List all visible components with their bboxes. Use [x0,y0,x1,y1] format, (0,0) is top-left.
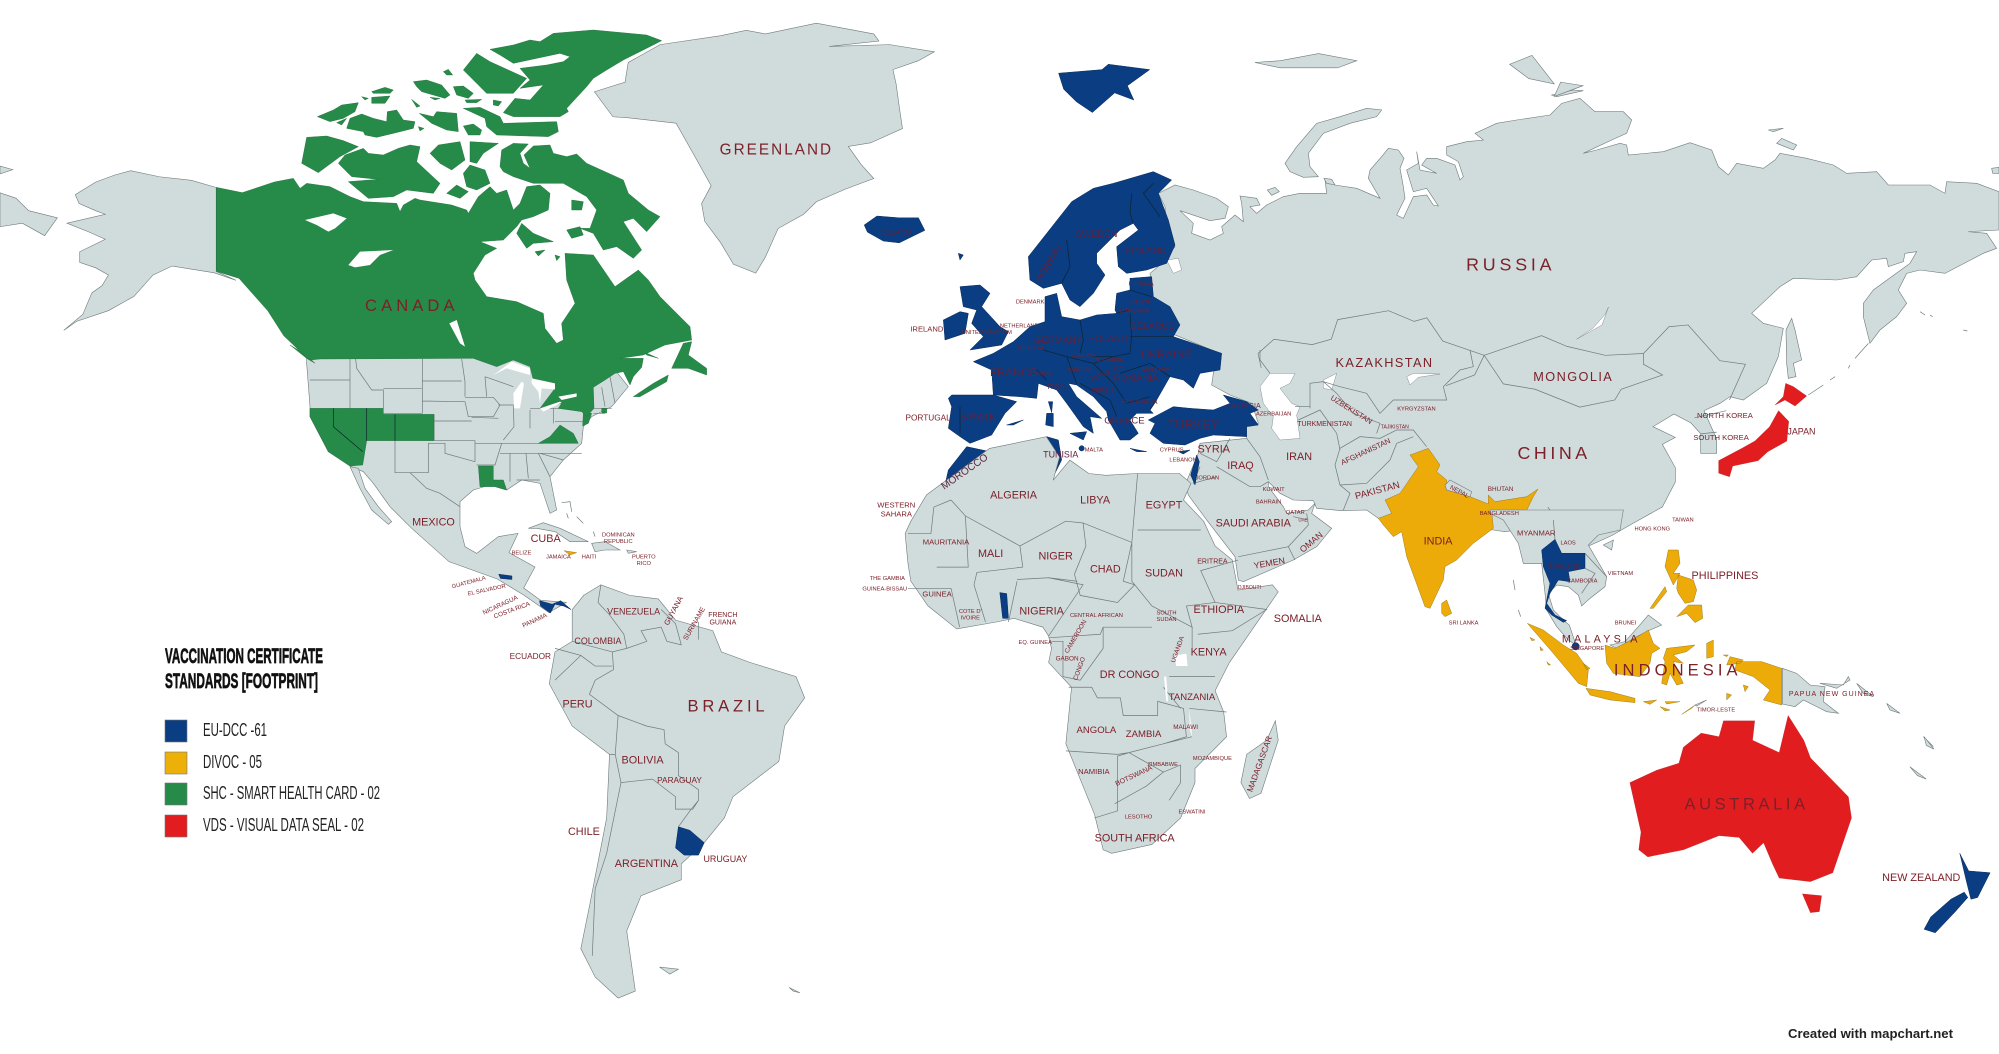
small country names: COSTA RICA [493,600,532,620]
country: Iceland [864,216,925,243]
small country names: BANGLADESH [1480,511,1519,517]
labels on European countries [878,228,1580,571]
country: Thailand [1542,539,1585,622]
medium country names: ARGENTINA [615,858,679,870]
labels on European countries: SWEDEN [1075,229,1117,240]
map: Russia, Central Asia, China, Middle East [1150,90,1999,582]
small country names: CZECHIA [1071,353,1096,359]
small country names: MOLDOVA [1142,367,1171,373]
Caspian Sea [1260,373,1300,440]
small country names: ESWATINI [1179,809,1206,815]
medium country names: JAPAN [1787,427,1815,437]
medium country names: CHILE [568,826,600,838]
island: Sakhalin [1786,318,1802,378]
labels on European countries: FRANCE [990,367,1037,379]
small country names: CAMEROON [1064,618,1089,655]
small country names: JAMAICA [546,554,571,560]
labels on European countries: GREECE [1104,415,1145,426]
small country names: CENTRAL AFRICAN [1070,613,1123,619]
Morocco [927,447,993,495]
small country names: SOUTH KOREA [1693,433,1750,442]
labels on European countries: BULGARIA [1122,399,1158,406]
country: Panama [539,601,571,613]
medium country names: YEMEN [1253,555,1286,571]
Middle East and Central Asia borders [1193,350,1473,560]
medium country names: PARAGUAY [657,776,702,785]
labels on European countries: GEORGIA [1228,403,1261,410]
continent: South America [549,585,805,998]
small country names: QATAR [1286,510,1305,516]
small country names: MALTA [1085,447,1103,453]
large country names: INDONESIA [1614,661,1742,680]
Canadian Maritime islands [290,342,707,397]
map: Southeast Asia and Indonesia [1490,510,1933,747]
small country names: MALAWI [1173,724,1198,731]
islands: Hispaniola and Puerto Rico [592,542,637,553]
small country names: TIMOR-LESTE [1697,707,1735,713]
country: Canada mainland [216,178,692,417]
medium country names: EGYPT [1146,500,1183,512]
small country names: KUWAIT [1263,487,1285,493]
country: Malaysia and Brunei (Borneo north) [1610,615,1662,648]
medium country names: BOLIVIA [621,755,664,767]
large country names: KAZAKHSTAN [1336,355,1434,370]
countries: United States, Mexico, Central America [307,357,628,613]
Tunisia [1041,437,1062,480]
legend [165,645,380,837]
medium country names: SUDAN [1145,567,1183,579]
country: India [1378,448,1538,608]
Kuril islands [1808,312,1967,395]
legend item: SHC [165,783,380,805]
small country names: CYPRUS [1160,447,1184,453]
labels on European countries: TUNISIA [1043,450,1078,460]
large country names: GREENLAND [720,141,833,158]
Asian borders [1258,311,1745,536]
small country names: MOZAMBIQUE [1193,756,1232,762]
small country names: TURKMENISTAN [1297,421,1352,428]
islands: New Caledonia and Vanuatu [1910,737,1934,779]
legend title: STANDARDS [FOOTPRINT] [165,670,318,693]
country: Sri Lanka [1442,600,1452,617]
map: Arctic islands and Siberia water [1059,54,1789,536]
small country names: GUINEA [922,590,953,599]
labels on European countries: HUNGARY [1090,364,1125,383]
legend title [165,645,323,693]
Lake Ladoga [1167,258,1182,273]
large country names: AUSTRALIA [1685,795,1809,814]
labels on European countries: MOROCCO [940,452,990,492]
small country names: DJIBOUTI [1238,585,1261,591]
small country names: TAJIKISTAN [1381,424,1409,430]
small country names: MAURITANIA [923,537,970,546]
small country names: GUYANA [662,594,685,627]
small country names: ZIMBABWE [1147,762,1178,768]
medium country names: SOMALIA [1274,613,1323,625]
legend title: VACCINATION CERTIFICATE [165,645,323,668]
small country names: MADAGASCAR [1246,735,1274,793]
small country names [451,282,1754,820]
medium country names: MALI [978,548,1003,560]
Smart Health Card: New Jersey [583,413,592,426]
legend item: EU-DCC [165,720,267,742]
medium country names: ALGERIA [990,489,1038,501]
Smart Health Card: Virginia [538,425,578,443]
small country names: CAMBODIA [1567,579,1598,585]
map: Middle East and South Asia [1193,350,1538,617]
medium country names: SYRIA [1197,444,1231,456]
Israel [1191,455,1199,485]
small country names: SWITZ. [1034,371,1054,377]
Scandinavia and Finland [1028,172,1175,307]
map: Japan Hokkaido and Kurils [1775,312,1967,406]
state lines in green block [333,408,395,452]
medium country names: MEXICO [412,516,455,528]
labels on European countries: ROMANIA [1114,373,1159,384]
small country names: HONG KONG [1634,526,1671,532]
medium country names: PERU [562,699,593,711]
medium country names: TANZANIA [1169,692,1216,703]
small country names: PUERTO [632,554,656,560]
small country names: UNITED KINGDOM [962,330,1012,336]
large country names: CHINA [1517,443,1591,463]
medium country names: URUGUAY [703,854,747,864]
Aral Sea and Lake Balkhash [1323,373,1440,390]
Tasmania [1802,894,1822,913]
country: Togo [1000,593,1008,618]
small country names: COTE D' [959,609,982,615]
country: Singapore [1572,643,1579,650]
medium country names: KENYA [1191,646,1227,658]
small country names: BRUNEI [1615,621,1637,627]
small country names: SLOVAKIA [1095,358,1123,364]
islands: Falklands and South Georgia [659,967,800,993]
small country names: TAIWAN [1672,517,1694,523]
medium country names: LIBYA [1080,495,1111,507]
islands: Chukotka wrap [0,166,57,236]
small country names: ESTONIA [1129,282,1154,288]
continent: Africa [905,437,1278,853]
labels on European countries: FINLAND [1126,246,1167,257]
lake and river water [1164,654,1192,737]
state borders [310,359,615,507]
legend item: SHC: SHC - SMART HEALTH CARD - 02 [203,783,380,803]
small Pacific islands [1513,580,1933,747]
small country names: AUSTRIA [1067,367,1092,373]
small country names: BELGIUM [1017,345,1043,351]
country: Indonesia [1527,623,1782,714]
small country names: NORTH KOREA [1697,411,1754,420]
map: Greenland, Alaska and Chukotka wrap [0,23,934,330]
archipelago: Svalbard [1059,64,1150,112]
small country names: KYRGYZSTAN [1397,407,1436,413]
medium country names [412,324,1961,884]
island: Novaya Zemlya [1285,108,1382,177]
small country names: ERITREA [1197,559,1228,566]
islands: Franz Josef Land and Severnaya Zemlya [1255,54,1583,96]
medium country names: CHAD [1090,563,1121,575]
small country names: SINGAPORE [1570,646,1604,652]
water: Great Lakes and Lake Winnipeg [449,303,577,412]
medium country names: IRAQ [1227,460,1254,472]
Smart Health Card: Louisiana [478,466,507,490]
Bahamas [562,502,595,537]
large country names: MALAYSIA [1562,634,1641,646]
small country names: WESTERN [877,500,915,509]
medium country names: PORTUGAL [905,414,951,423]
Ireland [943,312,968,340]
medium country names: NIGERIA [1019,606,1065,618]
map: Oceania [1630,716,1990,933]
small country names: EQ. GUINEA [1019,640,1052,646]
United Kingdom [960,285,1008,350]
map: Africa and South America [499,437,1278,998]
islands: Kolguev and Severnaya Zemlya [1267,90,1583,195]
medium country names: COLOMBIA [574,636,621,646]
small country names: GUIANA [709,620,737,627]
country: Australia [1630,716,1851,882]
European borders [960,183,1173,433]
country: Japan, Honshu and Kyushu [1719,411,1789,477]
medium country names: ZAMBIA [1126,729,1162,740]
small country names: SUDAN [1157,617,1177,623]
legend item: VDS [165,815,364,837]
Smart Health Card: Connecticut [602,408,607,413]
small country names: UGANDA [1170,635,1186,664]
small country names: LEBANON [1169,458,1197,464]
country: New Zealand [1924,853,1990,933]
labels on European countries: NORWAY [1034,241,1066,283]
labels on European countries: SPAIN [960,412,998,424]
small country names: UZBEKISTAN [1329,393,1374,426]
African borders [908,474,1267,818]
labels on European countries: TURKEY [1167,416,1220,431]
Great Bear and Great Slave lakes [305,213,393,267]
medium country names: IRELAND [910,324,944,333]
Turkey and Georgia [1148,395,1258,445]
small country names: EL SALVADOR [467,584,506,598]
labels on European countries: POLAND [1088,334,1128,345]
labels on European countries: BELARUS [1130,321,1175,332]
small country names: BELIZE [512,551,531,557]
South American borders [555,585,698,956]
small country names: SOUTH [1157,611,1177,617]
mainland Southeast Asia [1490,510,1623,645]
labels on European countries: ITALY [1048,384,1066,391]
medium country names: SAUDI ARABIA [1216,518,1292,530]
medium country names: DR CONGO [1100,669,1159,681]
large country names: MONGOLIA [1533,369,1613,384]
map: Europe and Mediterranean (EU-DCC) [927,172,1258,495]
small country names: FRENCH [708,612,737,619]
legend item: DIVOC [165,752,262,774]
small country names: LATVIA [1131,299,1151,305]
Baja California [350,467,392,524]
large country names: CANADA [365,296,459,315]
small country names: NETHERLANDS [1000,324,1043,330]
countries: Russia, Central Asia, China, Middle East [1150,98,1999,582]
country: Japan, Hokkaido [1775,383,1807,406]
map: USA, Mexico, Central America [290,342,707,613]
continental Europe [973,277,1222,440]
medium country names: NEW ZEALAND [1882,872,1961,884]
medium country names: ETHIOPIA [1194,604,1245,616]
country: Philippines [1650,550,1703,623]
country: Greenland [594,23,934,273]
small country names: AZERBAIJAN [1256,412,1291,418]
small country names: LITHUANIA [1120,308,1150,314]
Lake Baikal [1577,307,1608,339]
islands: Wrangel and New Siberian [1768,128,1999,173]
medium country names: SOUTH AFRICA [1095,832,1175,844]
labels on European countries: SERBIA [1091,388,1115,395]
country: Alaska [64,171,236,330]
Southeast Asia borders [1553,520,1607,593]
medium country names: ANGOLA [1077,725,1117,736]
credit: Created with mapchart.net [1788,1027,1954,1041]
countries: Papua New Guinea and Timor-Leste [1695,668,1900,713]
small country names: DOMINICAN [602,533,635,539]
small country names: JORDAN [1196,475,1219,481]
island: Jamaica [564,551,577,555]
labels on European countries: ICELAND [878,228,912,237]
country: Honduras/El Salvador [499,574,512,579]
medium country names: PHILIPPINES [1692,570,1758,582]
small country names: CONGO [1072,656,1087,681]
Spain and Portugal [948,395,1017,443]
medium country names: CUBA [531,533,561,545]
small country names: HAITI [582,554,597,560]
island: Madagascar [1241,721,1278,799]
map labels [365,141,1961,884]
medium country names: NIGER [1038,551,1073,563]
Hainan [1603,540,1613,550]
small country names: SAHARA [881,509,913,518]
medium country names: PAPUA NEW GUINEA [1789,691,1875,698]
legend item: DIVOC: DIVOC - 05 [203,752,262,772]
large country names: RUSSIA [1466,254,1555,274]
small country names: SRI LANKA [1449,621,1479,627]
small country names: THE GAMBIA [870,576,905,582]
small country names: PAKISTAN [1354,480,1401,502]
large country names: BRAZIL [687,696,768,715]
small country names: REPUBLIC [604,539,633,545]
legend item: EU-DCC: EU-DCC -61 [203,720,267,740]
small country names: RICO [637,561,652,567]
Smart Health Card: California, Nevada, Utah, Colorado [310,408,434,466]
medium country names: INDIA [1424,535,1453,547]
small country names: PANAMA [521,612,549,630]
Canadian Arctic islands [302,30,662,261]
small country names: LAOS [1560,540,1576,546]
small country names: NAMIBIA [1078,767,1110,776]
islands: Cuba [528,523,588,542]
medium country names: ECUADOR [510,652,551,661]
large country names [365,141,1809,814]
small country names: LESOTHO [1125,814,1153,820]
small country names: GUINEA-BISSAU [862,586,907,592]
small country names: NEPAL [1449,484,1470,500]
small country names: SURINAME [683,606,707,642]
small country names: IVOIRE [961,616,980,622]
Mediterranean islands [958,253,1190,454]
country: Uruguay [676,827,704,855]
labels on European countries: GERMANY [1034,335,1083,346]
small country names: NICARAGUA [482,594,520,617]
small country names: BAHRAIN [1256,500,1281,506]
medium country names: VENEZUELA [607,607,660,617]
map: Canada [216,30,692,417]
small country names: BOTSWANA [1115,765,1154,788]
small country names: UAE [1298,517,1308,522]
labels on European countries: UKRAINE [1141,349,1192,361]
legend item: VDS: VDS - VISUAL DATA SEAL - 02 [203,815,364,835]
small country names: GUATEMALA [451,575,487,590]
country: Nepal [1445,480,1472,497]
medium country names: IRAN [1286,451,1312,463]
labels on European countries: THAILAND [1549,564,1580,571]
small country names: DENMARK [1016,299,1045,305]
small country names: AFGHANISTAN [1339,436,1392,467]
small country names: BHUTAN [1488,486,1514,493]
small country names: GABON [1056,655,1079,662]
small country names: OMAN [1298,530,1325,555]
small country names: VIETNAM [1608,571,1633,577]
small country names: MYANMAR [1517,528,1556,537]
Malta [1079,446,1084,451]
